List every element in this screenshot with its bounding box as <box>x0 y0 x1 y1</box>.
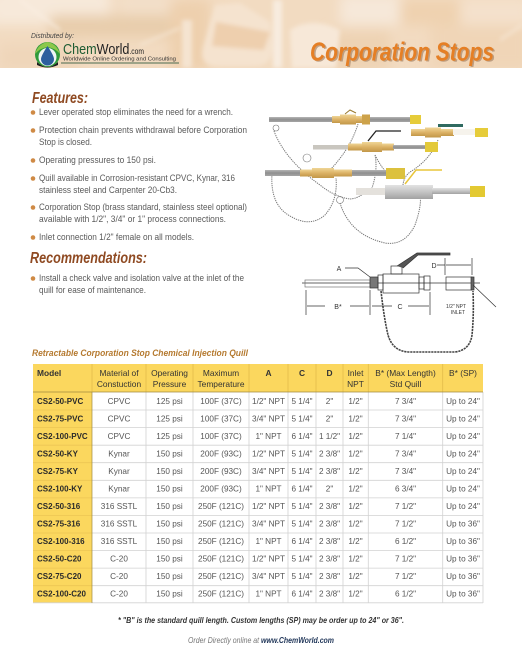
row CS2-50-KY: CS2-50-KY <box>37 450 79 458</box>
row CS2-50-316: 7 1/2" <box>395 502 416 511</box>
row CS2-100-C20: 1" NPT <box>255 590 282 598</box>
row CS2-100-C20: 2 3/8" <box>319 590 340 598</box>
features list: available with 1/2", 3/4" or 1" process connections. <box>39 214 226 224</box>
icon: ChemWorld drop logo <box>35 42 60 68</box>
row CS2-100-316: 250F (121C) <box>198 537 244 546</box>
table header row: NPT <box>347 379 364 389</box>
row CS2-100-KY: Up to 24" <box>446 484 480 494</box>
order online line: Order Directly online at www.ChemWorld.com <box>188 635 334 645</box>
recommendations list <box>31 273 244 295</box>
row CS2-50-PVC: Up to 24" <box>446 397 480 406</box>
row CS2-75-C20: 250F (121C) <box>198 572 244 581</box>
row CS2-75-PVC: 100F (37C) <box>200 414 242 424</box>
distributed by label: Distributed by: <box>31 31 74 40</box>
row CS2-50-316: 316 SSTL <box>101 502 138 511</box>
row CS2-75-C20: 3/4" NPT <box>252 572 285 581</box>
features list: Inlet connection 1/2" female on all models. <box>39 232 194 242</box>
recommendations list: quill for ease of maintenance. <box>39 285 146 295</box>
row CS2-50-C20: 250F (121C) <box>198 554 244 564</box>
row CS2-75-PVC: 7 3/4" <box>395 414 416 424</box>
stop 1 <box>269 110 421 124</box>
row CS2-75-C20: 150 psi <box>156 572 183 581</box>
row CS2-75-316: 1/2" <box>348 520 363 528</box>
dimension labels: C <box>397 304 403 311</box>
row CS2-50-316 <box>37 502 480 511</box>
row CS2-75-KY: Kynar <box>108 467 130 476</box>
row CS2-50-316: 2 3/8" <box>319 502 340 511</box>
safety chain <box>381 291 473 352</box>
stop 4 <box>265 168 405 179</box>
row CS2-100-316: 6 1/2" <box>395 537 416 546</box>
row CS2-75-C20: C-20 <box>110 572 128 581</box>
row CS2-75-PVC: 1/2" <box>348 414 363 424</box>
row CS2-75-KY: 1/2" <box>348 467 363 476</box>
features list: Lever operated stop eliminates the need for a wrench. <box>39 107 233 117</box>
row CS2-100-KY: CS2-100-KY <box>37 484 83 494</box>
row CS2-50-C20: CS2-50-C20 <box>37 554 82 564</box>
row CS2-100-C20: CS2-100-C20 <box>37 590 86 598</box>
row CS2-100-C20: 6 1/4" <box>291 590 313 598</box>
heading: recommendations: Recommendations: <box>30 250 147 267</box>
row CS2-75-KY: 200F (93C) <box>200 467 242 476</box>
features list: Protection chain prevents withdrawal before Corporation <box>39 125 247 135</box>
row CS2-75-C20: 7 1/2" <box>395 572 416 581</box>
row CS2-75-KY: 5 1/4" <box>291 467 313 476</box>
features list <box>31 107 247 242</box>
ChemWorld wordmark: ChemWorld.com <box>63 41 144 58</box>
row CS2-100-316: CS2-100-316 <box>37 537 85 546</box>
row CS2-50-KY: 1/2" NPT <box>252 450 285 458</box>
row CS2-100-C20: 150 psi <box>156 590 183 598</box>
table header row: Constuction <box>97 379 141 389</box>
row CS2-50-KY: 5 1/4" <box>291 450 313 458</box>
row CS2-75-KY <box>37 467 480 476</box>
dimension diagram <box>302 253 496 352</box>
row CS2-75-KY: Up to 24" <box>446 467 480 476</box>
row CS2-50-PVC: 125 psi <box>156 397 183 406</box>
row CS2-75-316: CS2-75-316 <box>37 520 81 528</box>
row CS2-100-KY: 6 1/4" <box>291 484 313 494</box>
dimension labels <box>334 263 466 316</box>
row CS2-75-PVC: CS2-75-PVC <box>37 414 83 424</box>
valve outline <box>302 253 480 293</box>
row CS2-100-316: 6 1/4" <box>291 537 313 546</box>
row CS2-50-316: 1/2" NPT <box>252 502 285 511</box>
row CS2-75-C20: 5 1/4" <box>291 572 313 581</box>
row CS2-75-PVC: Up to 24" <box>446 414 480 424</box>
row CS2-100-KY: 1/2" <box>348 484 363 494</box>
row CS2-75-316 <box>37 520 480 528</box>
dimension labels: B* <box>334 304 342 311</box>
features list: Stop is closed. <box>39 137 92 147</box>
row CS2-100-PVC: 1" NPT <box>255 432 282 441</box>
stop 2 <box>411 124 488 138</box>
table header row: C <box>299 368 305 378</box>
row CS2-75-PVC: 5 1/4" <box>291 414 313 424</box>
row CS2-100-316 <box>37 537 480 546</box>
heading: features: Features: <box>32 90 88 107</box>
row CS2-50-KY: 7 3/4" <box>395 450 416 458</box>
table header row <box>37 368 477 389</box>
row CS2-100-KY: 6 3/4" <box>395 484 416 494</box>
row CS2-75-C20: 1/2" <box>348 572 363 581</box>
row CS2-75-PVC: 3/4" NPT <box>252 414 285 424</box>
row CS2-100-C20: 250F (121C) <box>198 590 244 598</box>
row CS2-50-C20: 1/2" NPT <box>252 554 285 564</box>
row CS2-75-C20: Up to 36" <box>446 572 480 581</box>
stop 3 <box>313 131 438 152</box>
table header row: Inlet <box>348 368 364 378</box>
row CS2-50-C20: 1/2" <box>348 554 363 564</box>
row CS2-50-PVC: 100F (37C) <box>200 397 242 406</box>
row CS2-75-PVC: 125 psi <box>156 414 183 424</box>
row CS2-50-PVC: CS2-50-PVC <box>37 397 83 406</box>
row CS2-100-C20: Up to 36" <box>446 590 480 598</box>
row CS2-50-C20: C-20 <box>110 554 128 564</box>
row CS2-100-C20: C-20 <box>110 590 128 598</box>
distributor logo block <box>31 31 179 68</box>
row CS2-75-316: 2 3/8" <box>319 520 340 528</box>
row CS2-100-KY <box>37 484 480 494</box>
specification table <box>33 364 483 603</box>
row CS2-50-PVC: CPVC <box>108 397 130 406</box>
features list: Operating pressures to 150 psi. <box>39 155 156 165</box>
row CS2-50-PVC: 5 1/4" <box>291 397 313 406</box>
row CS2-50-316: Up to 24" <box>446 502 480 511</box>
row CS2-75-316: 316 SSTL <box>101 520 138 528</box>
dimension labels: INLET <box>451 310 465 316</box>
row CS2-50-PVC: 1/2" NPT <box>252 397 285 406</box>
row CS2-50-C20: 5 1/4" <box>291 554 313 564</box>
row CS2-100-PVC: 6 1/4" <box>291 432 313 441</box>
table header row: Operating <box>151 368 188 378</box>
row CS2-75-C20 <box>37 572 480 581</box>
row CS2-50-C20: Up to 36" <box>446 554 480 564</box>
row CS2-75-316: Up to 36" <box>446 520 480 528</box>
row CS2-75-C20: CS2-75-C20 <box>37 572 82 581</box>
row CS2-100-PVC: CS2-100-PVC <box>37 432 88 441</box>
table header row: B* (Max Length) <box>375 368 436 378</box>
row CS2-100-KY: 1" NPT <box>255 484 282 494</box>
row CS2-100-KY: 150 psi <box>156 484 183 494</box>
row CS2-100-PVC: CPVC <box>108 432 130 441</box>
features list: Quill available in Corrosion-resistant CPVC, Kynar, 316 <box>39 173 235 183</box>
row CS2-50-C20 <box>37 554 480 564</box>
row CS2-50-PVC: 2" <box>326 397 333 406</box>
row CS2-50-KY: 2 3/8" <box>319 450 340 458</box>
row CS2-100-316: 316 SSTL <box>101 537 138 546</box>
dimension labels: D <box>431 263 437 270</box>
recommendations list: Install a check valve and isolation valve at the inlet of the <box>39 273 244 283</box>
row CS2-100-316: 150 psi <box>156 537 183 546</box>
row CS2-100-316: 1" NPT <box>255 537 282 546</box>
dimension labels: 1/2" NPT <box>446 304 466 310</box>
dimension labels: A <box>337 266 342 273</box>
row CS2-75-316: 250F (121C) <box>198 520 244 528</box>
row CS2-50-C20: 7 1/2" <box>395 554 416 564</box>
row CS2-50-PVC: 1/2" <box>348 397 363 406</box>
row CS2-75-PVC <box>37 414 480 424</box>
row CS2-100-PVC: 1/2" <box>348 432 363 441</box>
row CS2-100-KY: Kynar <box>108 484 130 494</box>
row CS2-75-C20: 2 3/8" <box>319 572 340 581</box>
tagline: Worldwide Online Ordering and Consulting <box>63 56 176 62</box>
row CS2-75-KY: 3/4" NPT <box>252 467 285 476</box>
product photo: corporation stops <box>265 110 488 243</box>
row CS2-100-316: 2 3/8" <box>319 537 340 546</box>
row CS2-100-PVC: 125 psi <box>156 432 183 441</box>
row CS2-100-PVC: 100F (37C) <box>200 432 242 441</box>
features list: Corporation Stop (brass standard, stainless steel optional) <box>39 202 247 212</box>
row CS2-100-316: Up to 36" <box>446 537 480 546</box>
row CS2-50-316: 1/2" <box>348 502 363 511</box>
row CS2-75-KY: 7 3/4" <box>395 467 416 476</box>
row CS2-75-316: 5 1/4" <box>291 520 313 528</box>
row CS2-75-316: 150 psi <box>156 520 183 528</box>
row CS2-50-C20: 2 3/8" <box>319 554 340 564</box>
row CS2-100-316: 1/2" <box>348 537 363 546</box>
row CS2-50-316: CS2-50-316 <box>37 502 81 511</box>
row CS2-50-PVC: 7 3/4" <box>395 397 416 406</box>
row CS2-100-KY: 2" <box>326 484 333 494</box>
row CS2-100-PVC: Up to 24" <box>446 432 480 441</box>
row CS2-100-C20: 6 1/2" <box>395 590 416 598</box>
row CS2-100-PVC: 7 1/4" <box>395 432 416 441</box>
row CS2-75-PVC: 2" <box>326 414 333 424</box>
row CS2-100-PVC: 1 1/2" <box>319 432 340 441</box>
table header row: Maximum <box>203 368 239 378</box>
table header row: D <box>326 368 333 378</box>
row CS2-75-KY: CS2-75-KY <box>37 467 79 476</box>
table title: Retractable Corporation Stop Chemical Injection Quill <box>32 347 248 358</box>
table header row: Pressure <box>153 379 187 389</box>
row CS2-50-KY <box>37 450 480 458</box>
row CS2-75-316: 3/4" NPT <box>252 520 285 528</box>
row CS2-75-KY: 150 psi <box>156 467 183 476</box>
table header row: A <box>265 368 272 378</box>
table header row: Std Quill <box>390 379 421 389</box>
features list: stainless steel and Carpenter 20-Cb3. <box>39 185 177 195</box>
row CS2-75-316: 7 1/2" <box>395 520 416 528</box>
table header row: Material of <box>99 368 139 378</box>
row CS2-50-KY: 1/2" <box>348 450 363 458</box>
row CS2-50-316: 250F (121C) <box>198 502 244 511</box>
row CS2-50-KY: Up to 24" <box>446 450 480 458</box>
dimension lines <box>306 258 496 315</box>
row CS2-100-KY: 200F (93C) <box>200 484 242 494</box>
row CS2-50-KY: 200F (93C) <box>200 450 242 458</box>
row CS2-50-C20: 150 psi <box>156 554 183 564</box>
header banner <box>0 0 522 70</box>
table header row: B* (SP) <box>449 368 477 378</box>
table header row: Model <box>37 368 61 378</box>
row CS2-75-KY: 2 3/8" <box>319 467 340 476</box>
row CS2-100-C20 <box>37 590 480 598</box>
row CS2-100-PVC <box>37 432 480 441</box>
row CS2-50-KY: Kynar <box>108 450 130 458</box>
footnote: * "B" is the standard quill length. Custom lengths (SP) may be order up to 24" or 36". <box>118 615 404 625</box>
row CS2-50-316: 150 psi <box>156 502 183 511</box>
table header row: Temperature <box>197 379 245 389</box>
row CS2-100-C20: 1/2" <box>348 590 363 598</box>
chains <box>272 124 438 243</box>
row CS2-75-PVC: CPVC <box>108 414 130 424</box>
row CS2-50-PVC <box>37 397 480 406</box>
row CS2-50-316: 5 1/4" <box>291 502 313 511</box>
stop 5 <box>356 170 485 199</box>
row CS2-50-KY: 150 psi <box>156 450 183 458</box>
